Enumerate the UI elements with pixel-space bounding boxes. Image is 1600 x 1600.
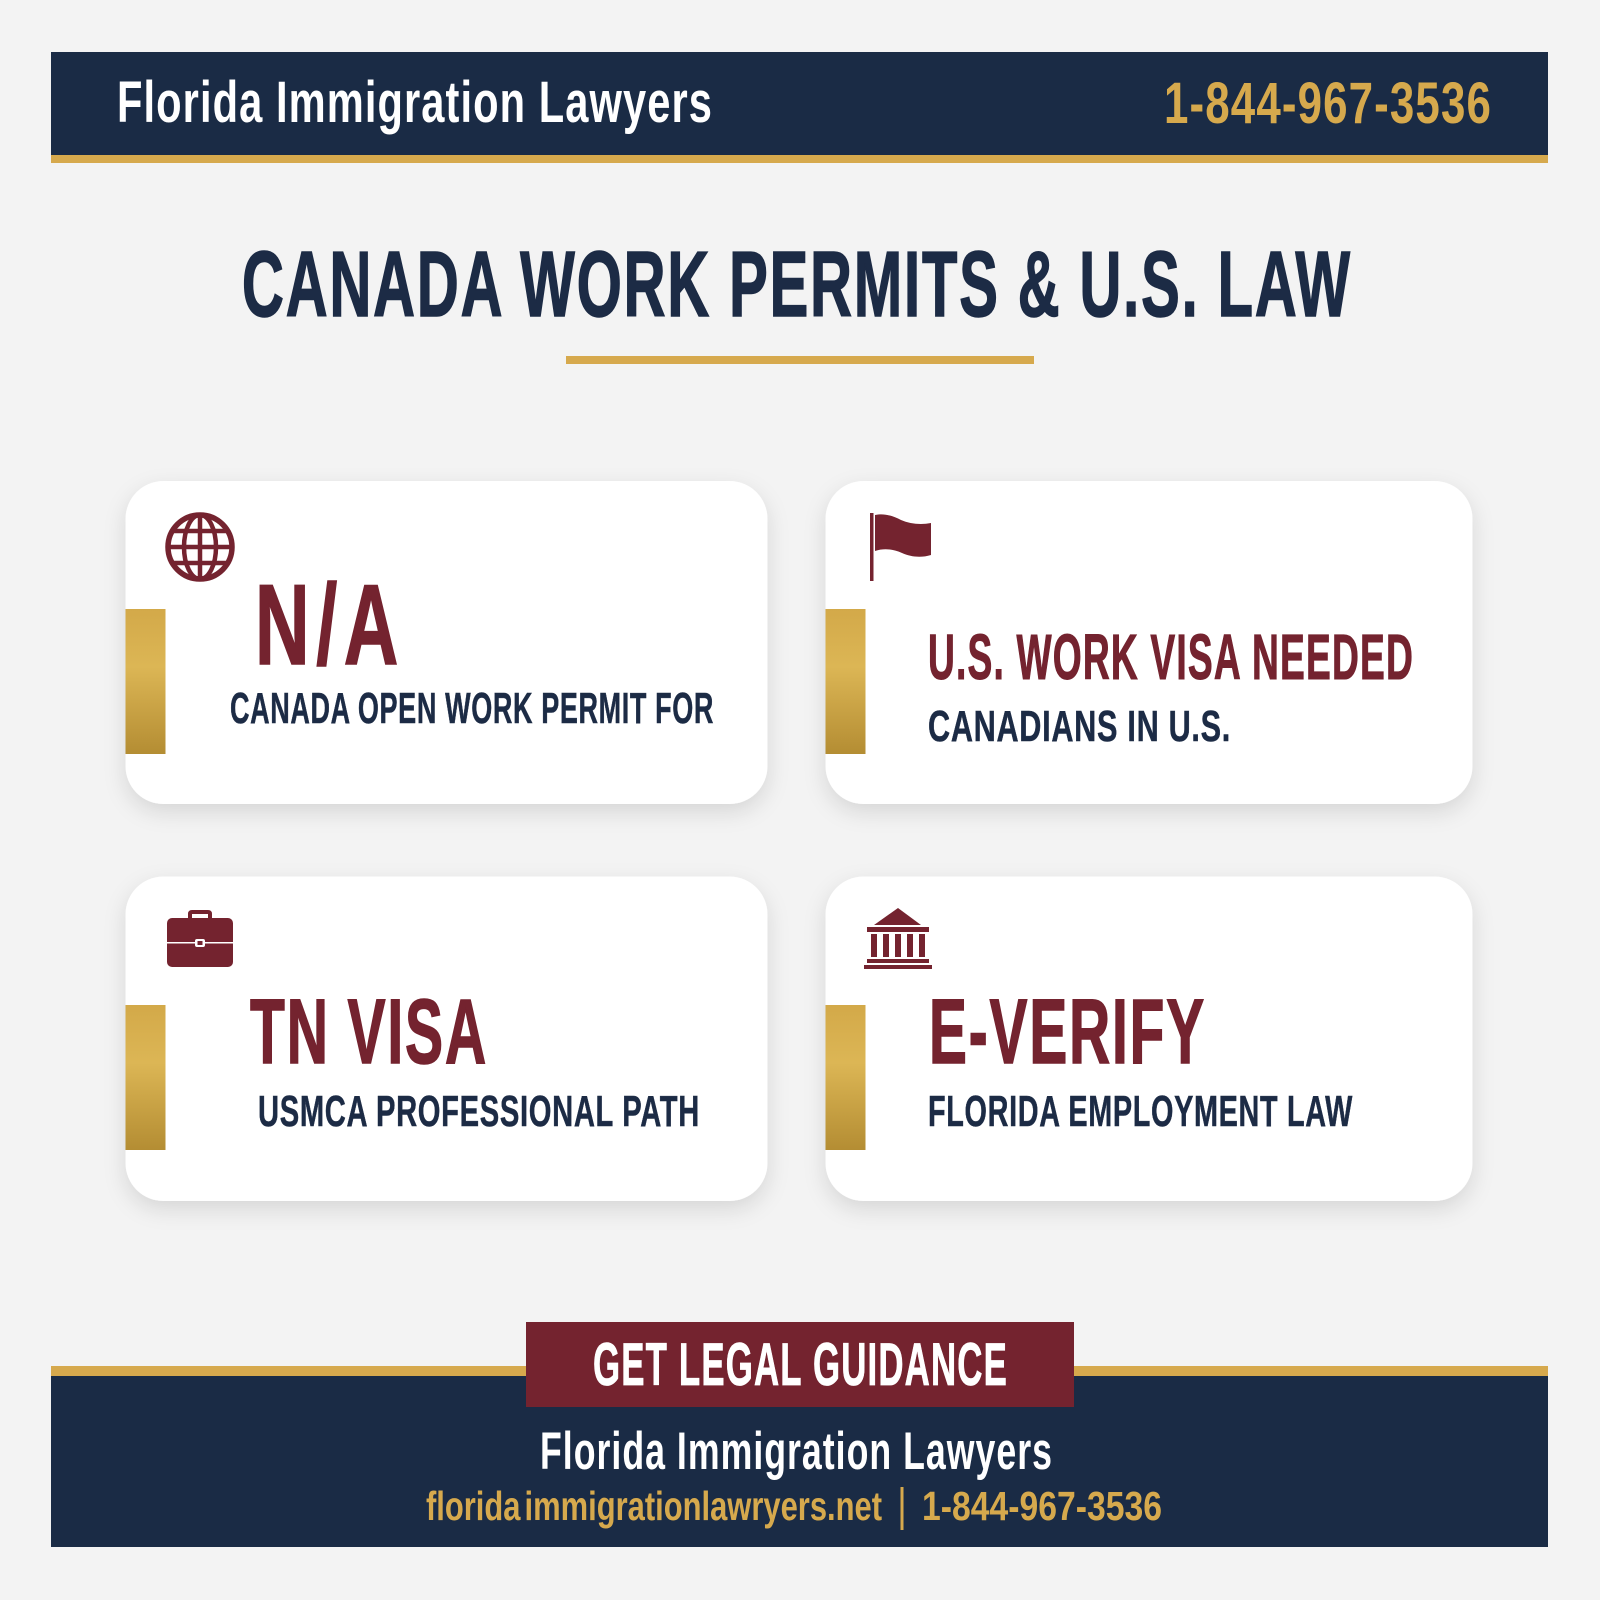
gold accent bar bbox=[826, 1005, 866, 1150]
icon: briefcase bbox=[167, 910, 233, 967]
header bar bbox=[51, 52, 1548, 163]
footer firm name: Florida Immigration Lawyers bbox=[540, 1422, 1053, 1481]
header phone number: 1-844-967-3536 bbox=[1164, 71, 1492, 136]
footer divider bbox=[900, 1487, 904, 1530]
panel: U.S. work visa card bbox=[826, 481, 1472, 804]
panel: E-Verify card bbox=[826, 876, 1472, 1201]
gold accent bar bbox=[826, 609, 866, 754]
statistic: TN visa: TN VISA bbox=[250, 981, 488, 1083]
statistic: N/A: N/A bbox=[255, 562, 405, 689]
call to action banner bbox=[526, 1322, 1074, 1407]
footer website: florida immigrationlawryers.net bbox=[426, 1483, 882, 1529]
panel: N/A card bbox=[126, 481, 768, 804]
gold accent bar bbox=[126, 1005, 166, 1150]
caption: Canada open work permit: CANADA OPEN WORK PERMIT FOR bbox=[230, 684, 714, 733]
icon: courthouse bbox=[864, 908, 932, 969]
footer bar bbox=[51, 1366, 1548, 1547]
header firm name: Florida Immigration Lawyers bbox=[117, 70, 713, 135]
caption: Canadians in U.S.: CANADIANS IN U.S. bbox=[928, 702, 1231, 751]
gold accent bar bbox=[126, 609, 166, 754]
statistic: E-Verify: E-VERIFY bbox=[929, 981, 1206, 1083]
call to action text: GET LEGAL GUIDANCE bbox=[593, 1331, 1008, 1398]
caption: USMCA professional path: USMCA PROFESSIONAL PATH bbox=[258, 1087, 700, 1136]
icon: flag bbox=[870, 513, 931, 581]
footer phone number: 1-844-967-3536 bbox=[922, 1483, 1162, 1529]
title underline bbox=[566, 356, 1034, 364]
panel: TN visa card bbox=[126, 876, 768, 1201]
icon: globe bbox=[168, 515, 232, 579]
caption: Florida employment law: FLORIDA EMPLOYMENT LAW bbox=[928, 1087, 1353, 1136]
